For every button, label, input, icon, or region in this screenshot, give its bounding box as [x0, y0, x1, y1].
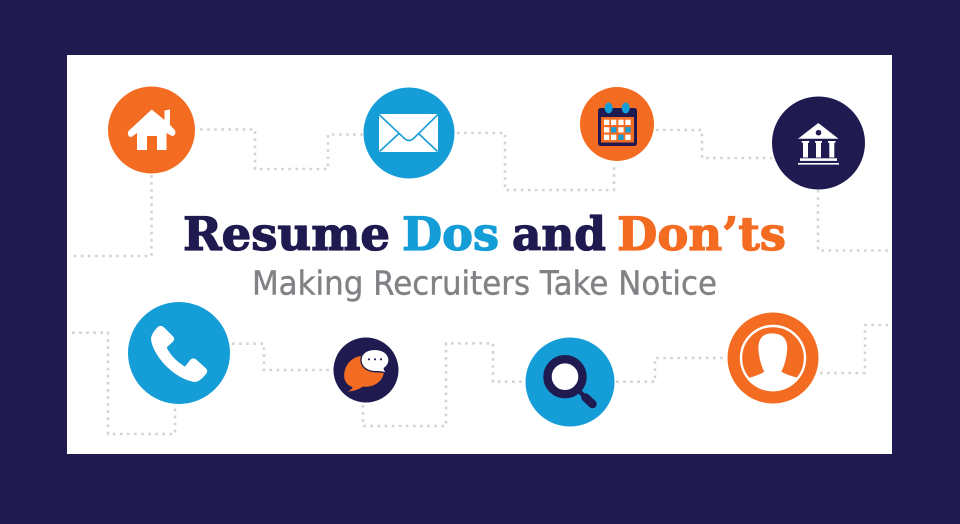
title	[183, 207, 786, 261]
title: Dos	[402, 207, 499, 261]
title: Don’ts	[617, 207, 786, 261]
icon: magnifying glass	[526, 338, 614, 426]
icon: calendar	[580, 87, 654, 161]
dotted connectors	[70, 130, 888, 434]
subtitle: Making Recruiters Take Notice	[252, 264, 717, 302]
title: Resume	[183, 207, 390, 261]
icon: house	[108, 86, 195, 174]
icon: bank building	[772, 96, 865, 190]
icon: telephone	[128, 302, 230, 404]
icon: envelope	[364, 88, 454, 178]
title: and	[512, 207, 606, 261]
white panel	[67, 55, 892, 454]
icon: person	[728, 312, 818, 404]
icon: speech bubbles	[334, 338, 398, 402]
